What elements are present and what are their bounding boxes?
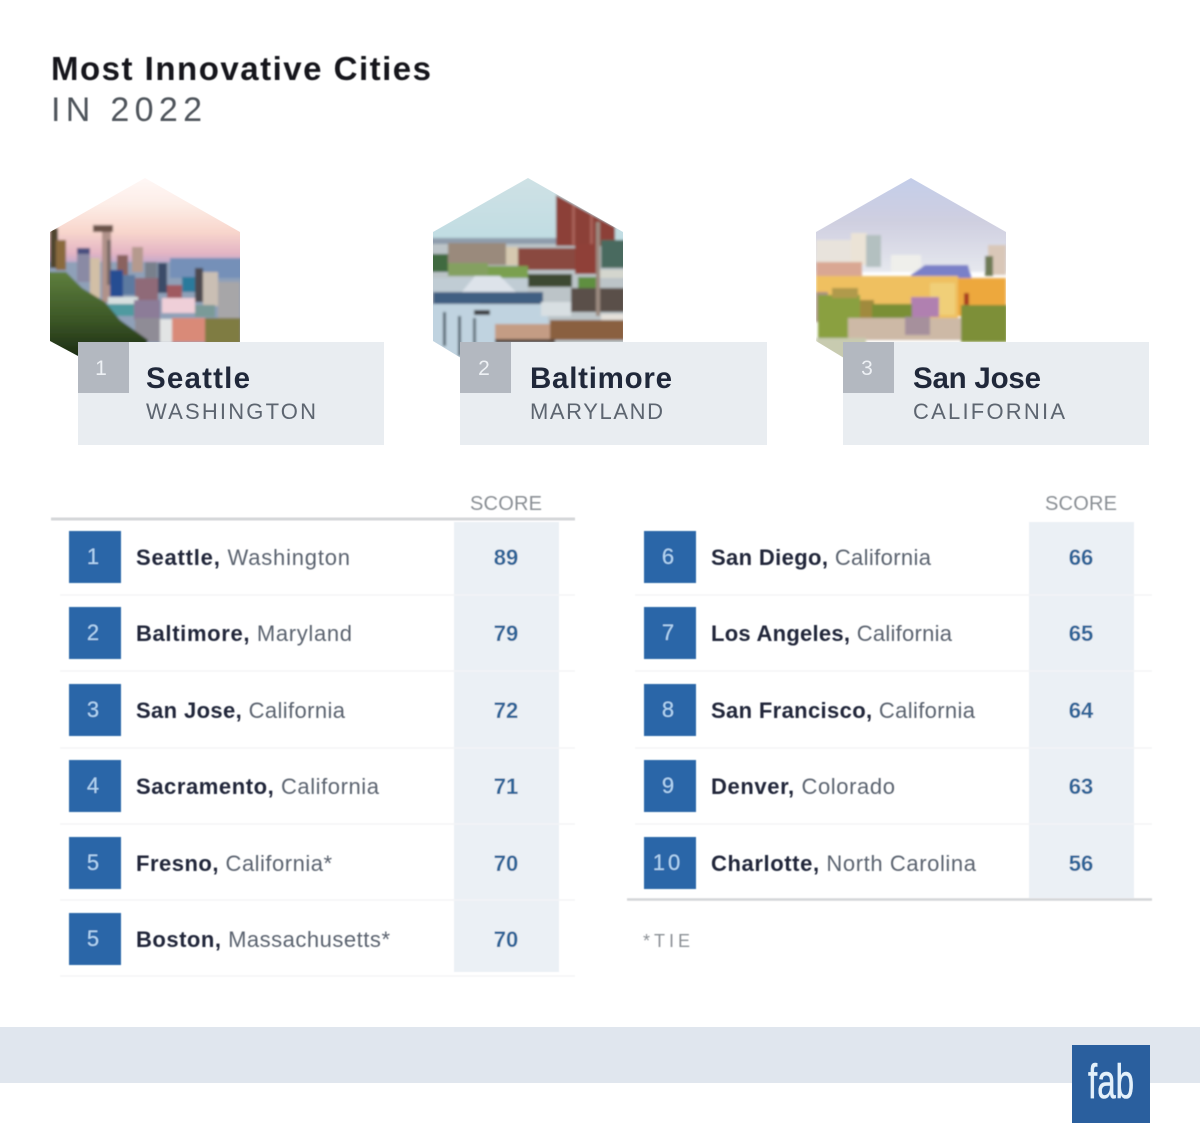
score heading: SCORE	[1045, 493, 1117, 515]
row 2: 2	[87, 620, 99, 645]
row 9	[644, 760, 1093, 812]
panel: San Jose	[843, 342, 1149, 445]
title: IN 2022	[51, 91, 202, 129]
row 9: Denver, Colorado	[711, 774, 895, 799]
row 7: Los Angeles, California	[711, 621, 953, 646]
rank badge 3: 3	[861, 357, 873, 380]
row 3: 72	[494, 698, 518, 723]
city name: Baltimore	[530, 362, 672, 395]
row 8: 64	[1069, 698, 1094, 723]
row 9: 63	[1069, 774, 1093, 799]
row 10: 10	[653, 850, 683, 875]
panel: Seattle	[78, 342, 384, 445]
row 5: 5	[87, 850, 99, 875]
table: ranks 1 to 5	[51, 493, 575, 976]
photo: Seattle skyline	[50, 178, 240, 356]
row 8: 8	[662, 697, 674, 722]
state: MARYLAND	[530, 399, 663, 424]
row 10: 56	[1069, 851, 1093, 876]
logo: fab	[1072, 1045, 1150, 1123]
row 5	[69, 837, 518, 889]
logo: fab: fab	[1088, 1056, 1134, 1109]
rank badge 2	[460, 342, 511, 393]
row 4: Sacramento, California	[136, 774, 380, 799]
row 10: Charlotte, North Carolina	[711, 851, 977, 876]
row 5 tie	[69, 913, 518, 965]
city name: Seattle	[146, 362, 250, 395]
rank badge 1	[78, 342, 129, 393]
state: WASHINGTON	[146, 399, 316, 424]
row 7	[644, 607, 1093, 659]
rank badge 3	[843, 342, 894, 393]
row 1	[69, 531, 518, 583]
rank badge 2: 2	[478, 357, 490, 380]
row 8	[644, 684, 1094, 736]
row 3	[69, 684, 518, 736]
score heading: SCORE	[470, 493, 542, 515]
row 7: 7	[662, 620, 674, 645]
row 5 tie: 5	[87, 926, 99, 951]
footer band	[0, 1027, 1200, 1083]
row 3: 3	[87, 697, 99, 722]
row 2: 79	[494, 621, 518, 646]
row 1: 89	[494, 545, 518, 570]
title: Most Innovative Cities	[51, 50, 431, 87]
row 6: 66	[1069, 545, 1093, 570]
row 4: 4	[87, 773, 99, 798]
row 5 tie: Boston, Massachusetts*	[136, 927, 390, 952]
photo: San Jose plaza	[812, 172, 1012, 360]
table: ranks 6 to 10	[627, 493, 1152, 951]
score column background	[454, 522, 559, 972]
row 6: San Diego, California	[711, 545, 932, 570]
row 7: 65	[1069, 621, 1093, 646]
city name: San Jose	[913, 362, 1041, 395]
row 1: 1	[87, 544, 99, 569]
row 6	[644, 531, 1093, 583]
row 10	[644, 837, 1093, 889]
panel: Baltimore	[460, 342, 767, 445]
row 8: San Francisco, California	[711, 698, 976, 723]
row 6: 6	[662, 544, 674, 569]
row 4: 71	[494, 774, 518, 799]
row 5 tie: 70	[494, 927, 518, 952]
title	[51, 50, 431, 129]
score column background	[1029, 522, 1134, 898]
tie footnote: *TIE	[643, 931, 690, 951]
photo: Baltimore harbor	[428, 172, 628, 360]
row 3: San Jose, California	[136, 698, 346, 723]
row 4	[69, 760, 518, 812]
state: CALIFORNIA	[913, 399, 1065, 424]
row 5: Fresno, California*	[136, 851, 332, 876]
row 5: 70	[494, 851, 518, 876]
rank badge 1: 1	[95, 357, 107, 380]
row 2: Baltimore, Maryland	[136, 621, 352, 646]
row 2	[69, 607, 518, 659]
row 9: 9	[662, 773, 674, 798]
row 1: Seattle, Washington	[136, 545, 350, 570]
